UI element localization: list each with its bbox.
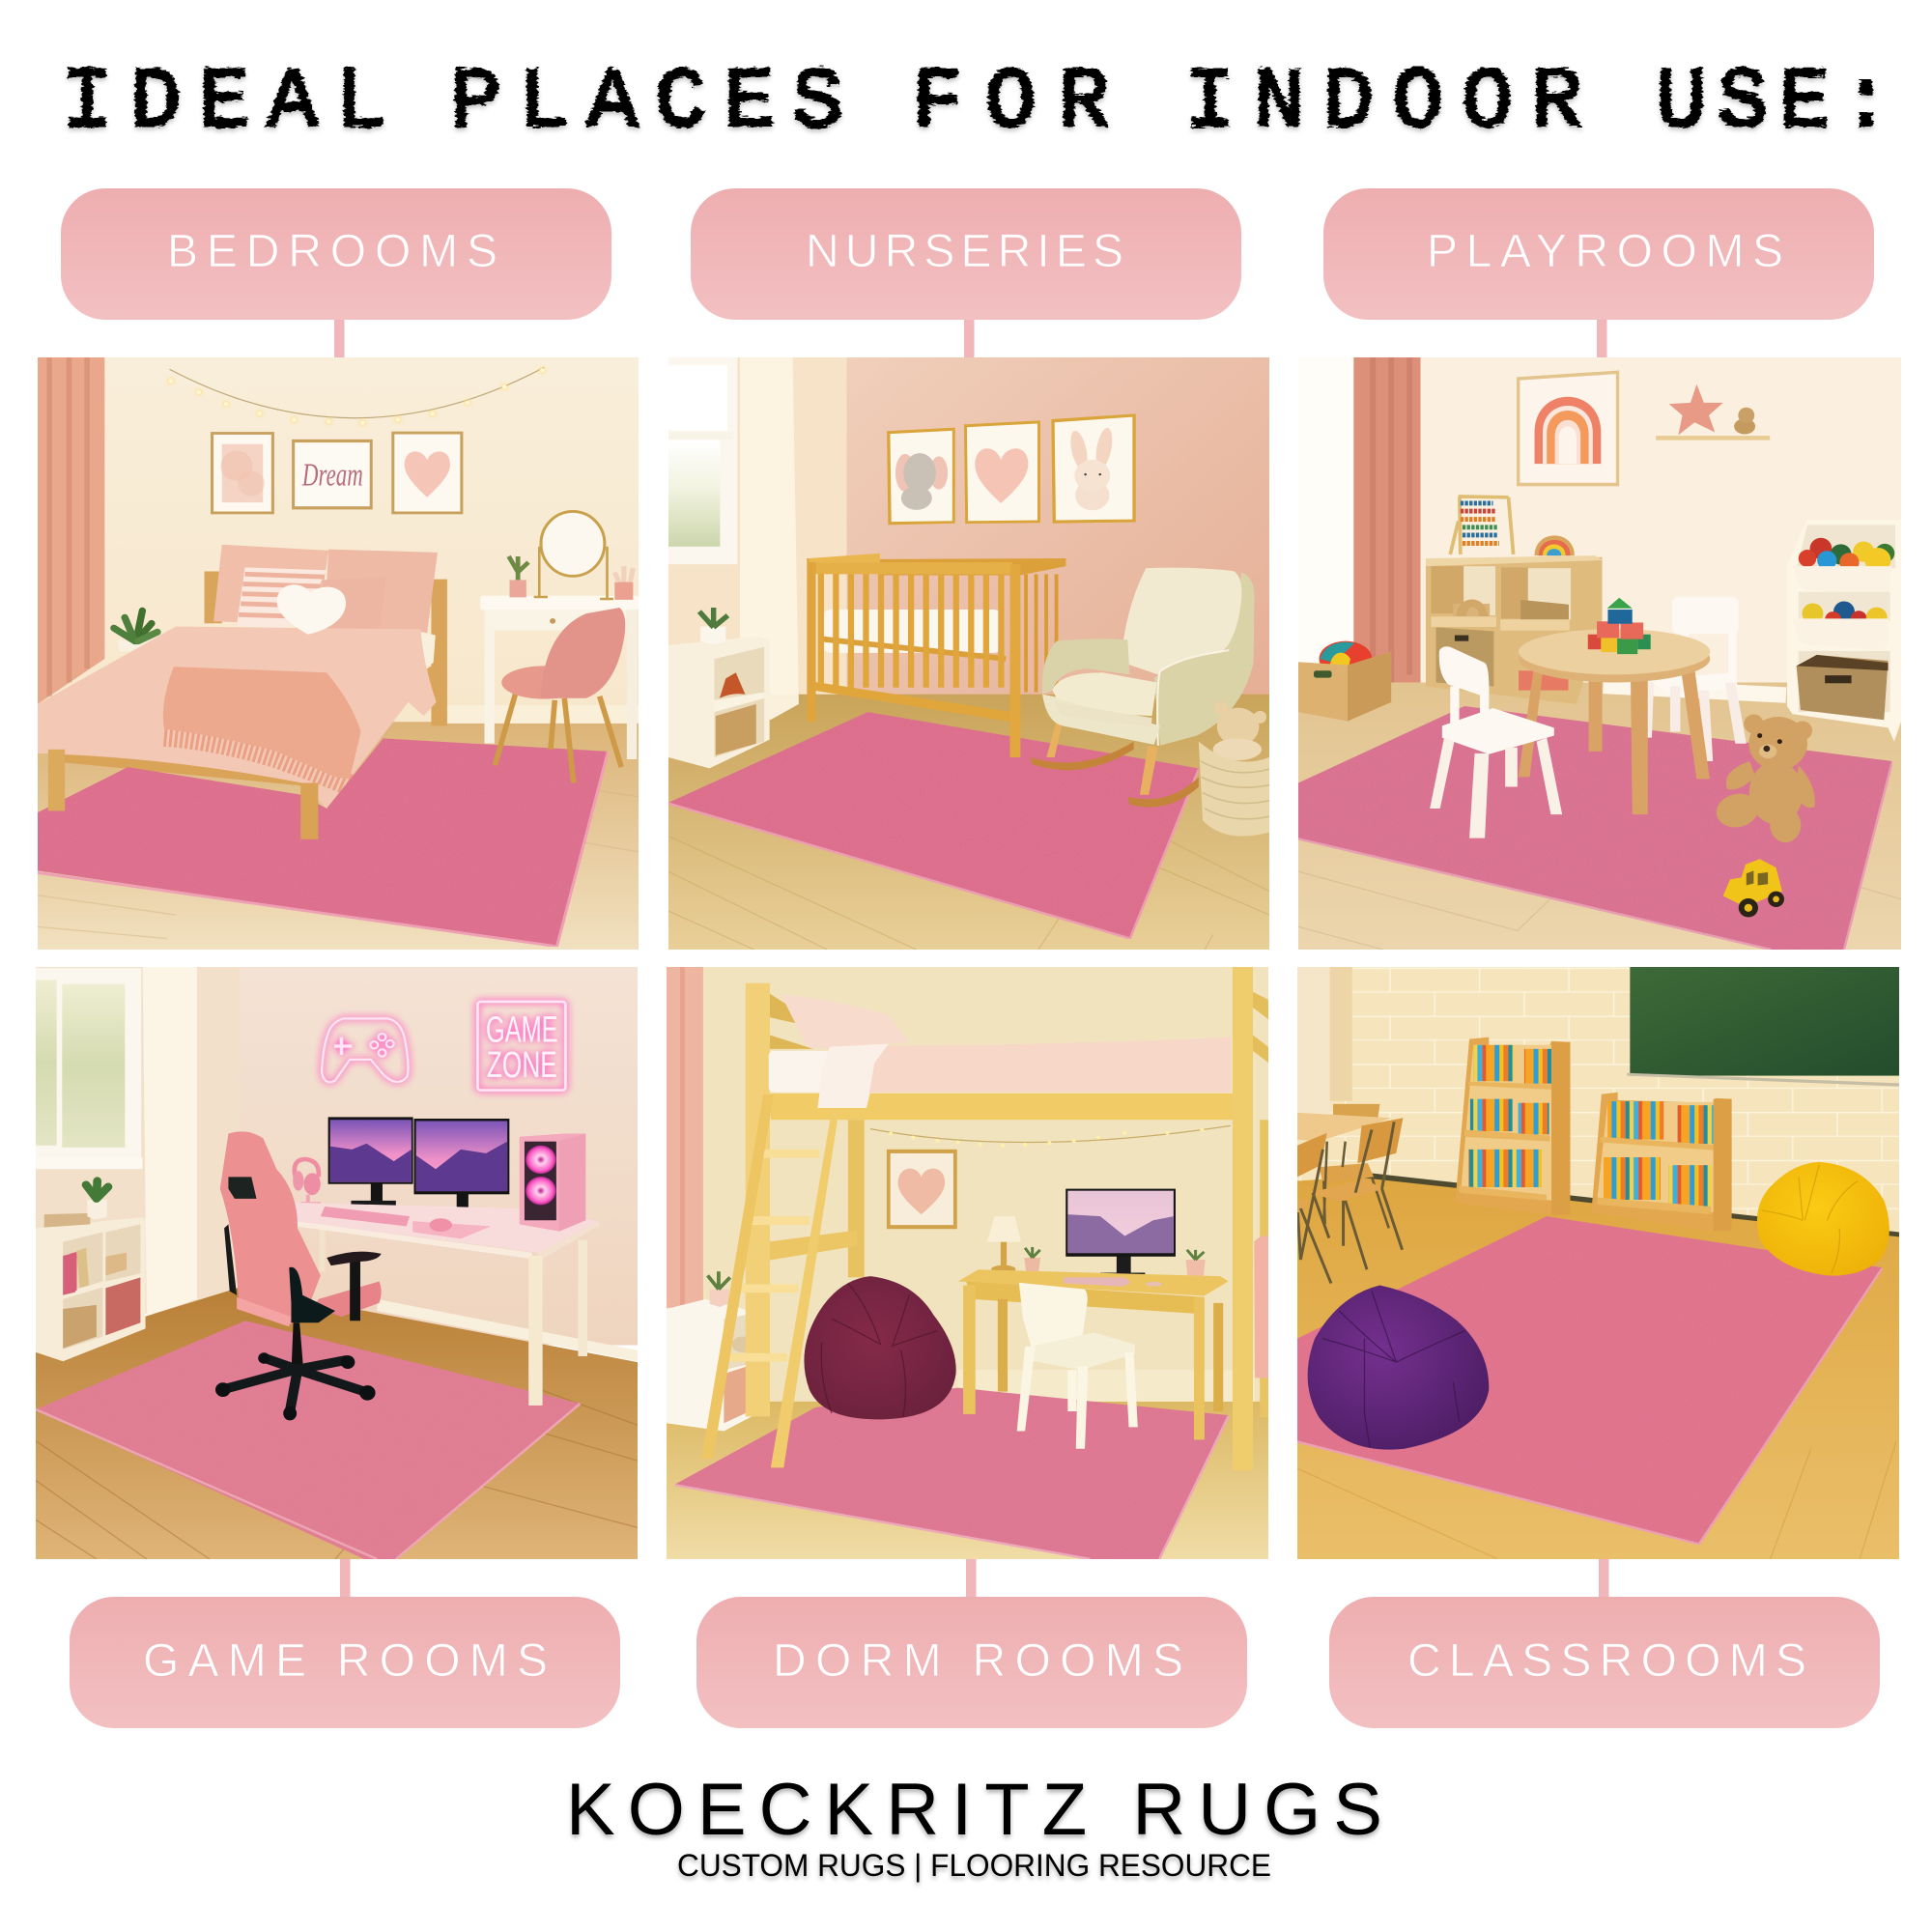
rug: [38, 738, 608, 947]
title: FOR: [912, 56, 1131, 152]
bookshelf right: [1591, 1093, 1732, 1232]
back chair: [1646, 597, 1747, 761]
desk: [958, 1269, 1229, 1439]
heading pill: dorm rooms: [696, 1559, 1247, 1728]
title: [62, 56, 1902, 152]
curtain: [1353, 357, 1420, 682]
title: INDOOR: [1184, 56, 1601, 152]
pc tower: [520, 1134, 585, 1232]
heading pill: game rooms: [70, 1559, 620, 1728]
rug: [1298, 706, 1892, 950]
panel: game room photo: [36, 967, 638, 1559]
heading pill: nurseries: NURSERIES: [806, 226, 1123, 277]
side table: [668, 608, 770, 768]
headboard: [205, 571, 447, 725]
heading pill: bedrooms: BEDROOMS: [167, 226, 497, 277]
wall art: elephant: [887, 428, 955, 525]
potted plant: [114, 611, 157, 652]
bed legs: [48, 750, 318, 839]
vanity vase and cup: [509, 556, 633, 600]
sheer curtain: [740, 357, 799, 720]
crate with ball: [1298, 641, 1391, 721]
toy car: [1723, 859, 1784, 918]
pillows: [213, 545, 438, 633]
desk front leg over rug: [528, 1256, 543, 1406]
wall art: bunny: [1051, 413, 1136, 524]
curtain: [38, 357, 104, 704]
neon controller sign: [322, 1018, 409, 1082]
shelf with star and bear: [1656, 384, 1770, 440]
panel: playroom photo: [1298, 357, 1901, 950]
heading pill: bedrooms: [61, 188, 611, 357]
sheer curtain: [143, 967, 197, 1316]
rocking chair: [1030, 568, 1255, 808]
desk lamp and plants: [987, 1216, 1206, 1278]
desk chair: [495, 608, 625, 782]
yellow beanbag: [1757, 1162, 1889, 1276]
keyboard and mouse: [321, 1207, 491, 1238]
rug: [668, 712, 1199, 939]
panel: nursery photo: [668, 357, 1269, 950]
heading pill: classrooms: CLASSROOMS: [1407, 1635, 1806, 1687]
headphones: [293, 1159, 321, 1204]
wall art: heart print: [391, 432, 463, 514]
heading pill: playrooms: [1323, 188, 1874, 357]
neon game zone sign: ZONE: [487, 1045, 557, 1086]
title: USE:: [1656, 56, 1902, 152]
duvet: [38, 627, 437, 809]
rug: [675, 1388, 1229, 1559]
brand name: KOECKRITZ RUGS: [566, 1769, 1382, 1851]
heading pill: classrooms: [1329, 1559, 1880, 1728]
title: IDEAL: [62, 56, 404, 152]
desk: [294, 1203, 599, 1406]
storage unit with balls: [1787, 520, 1901, 742]
abacus: [1450, 497, 1514, 554]
neon game zone sign: GAME: [486, 1010, 558, 1050]
heading pill: playrooms: PLAYROOMS: [1427, 226, 1783, 277]
basket with teddy: [1199, 701, 1269, 837]
gaming chair: [215, 1131, 382, 1420]
window: [36, 968, 143, 1169]
panel: dorm room photo: [667, 967, 1268, 1559]
curtain: [667, 967, 703, 1308]
monitor: [1065, 1189, 1176, 1277]
teddy bear: [1713, 715, 1815, 842]
cube shelf: [1426, 555, 1603, 704]
window: [668, 357, 737, 564]
heading pill: nurseries: [691, 188, 1241, 357]
bed frame: [59, 749, 301, 785]
round table: [1519, 629, 1710, 814]
crib: [807, 554, 1065, 757]
brand tagline: CUSTOM RUGS | FLOORING RESOURCE: [677, 1848, 1271, 1883]
fairy lights: [870, 1125, 1231, 1148]
vanity mirror: [534, 511, 613, 599]
bookcase: [36, 1180, 146, 1361]
blocks: [1588, 598, 1651, 654]
white cabinet: [667, 1271, 757, 1431]
desk chair: [1017, 1283, 1138, 1449]
rug: [36, 1321, 581, 1559]
rainbow print: [1517, 370, 1619, 486]
panel: bedroom photo: [38, 357, 639, 950]
mattress edge: [418, 631, 436, 668]
wall art: heart: [964, 420, 1040, 524]
front chair: [1430, 646, 1562, 838]
loft bed: [746, 967, 1268, 1470]
panel: classroom photo: [1297, 967, 1899, 1559]
heart pillow: [277, 584, 346, 635]
toy rainbow: [1535, 535, 1575, 555]
beanbag: [804, 1276, 956, 1419]
throw blanket: [163, 667, 361, 785]
monitors: [328, 1117, 509, 1215]
wall art: Dream print: [292, 440, 373, 509]
wall art: abstract print: [211, 432, 274, 514]
ladder: [701, 1094, 839, 1467]
wall art heart: [887, 1150, 957, 1229]
neon game zone sign: [477, 1002, 565, 1091]
title: PLACES: [450, 56, 861, 152]
table and chairs: [1297, 1104, 1403, 1284]
vanity desk: [480, 596, 639, 759]
folded pink blanket: [1254, 1236, 1268, 1378]
heading pill: dorm rooms: DORM ROOMS: [773, 1635, 1183, 1687]
string lights: [167, 367, 546, 426]
wall art: Dream print: Dream: [301, 457, 363, 493]
purple beanbag: [1308, 1286, 1489, 1450]
bookshelf left: [1455, 1037, 1570, 1215]
rug: [1297, 1216, 1882, 1545]
chalkboard: [1627, 967, 1899, 1087]
heading pill: game rooms: GAME ROOMS: [143, 1635, 548, 1687]
